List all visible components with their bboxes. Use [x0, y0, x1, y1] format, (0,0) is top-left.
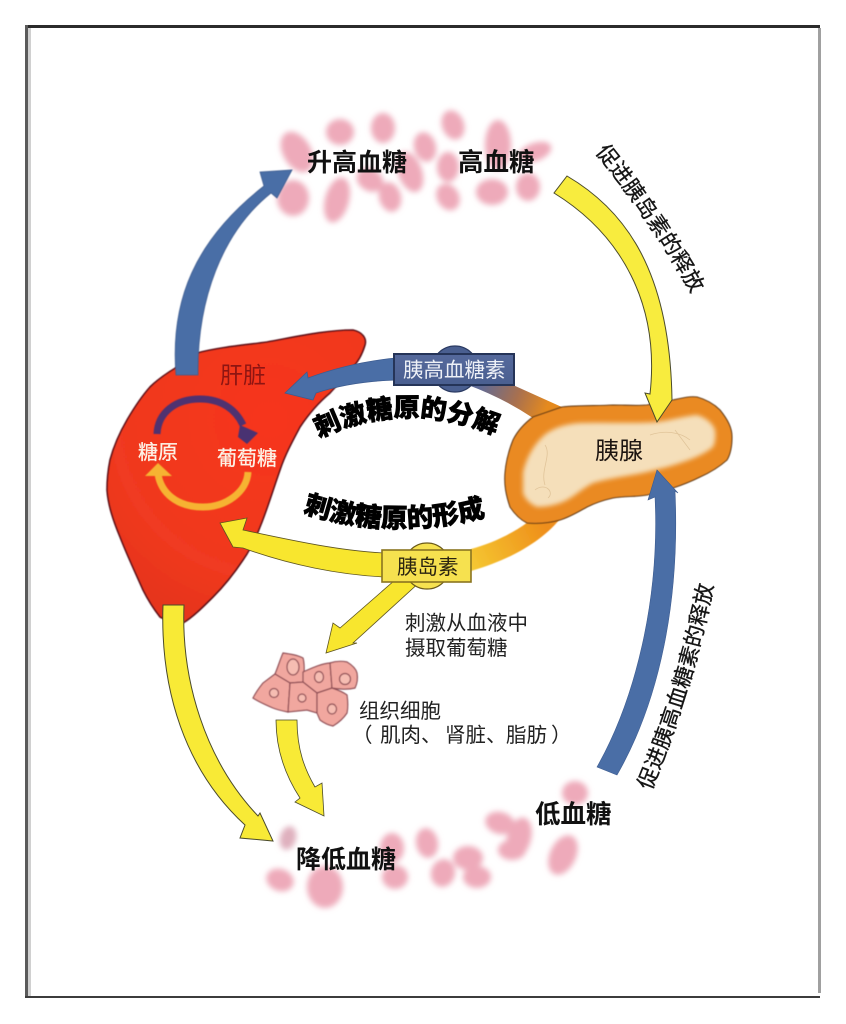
pancreas label: 胰腺	[595, 438, 643, 465]
label: glycogen: 糖原	[138, 441, 178, 464]
label: tissue cells: 脂肪	[506, 724, 547, 747]
label: tissue cells: 肾脏、	[445, 724, 506, 747]
label: low blood glucose: 低血糖	[535, 801, 612, 829]
arrow: cells lower blood glucose	[276, 720, 324, 816]
tissue cells	[253, 653, 357, 726]
insulin box: 胰岛素	[397, 556, 458, 579]
arrow: liver lowers blood glucose	[163, 605, 273, 841]
arrow: liver raises blood glucose	[175, 170, 292, 375]
glucagon box	[394, 346, 514, 392]
label: promotes insulin release: 促进胰岛素的释放	[596, 144, 704, 294]
label: stimulates glycogen formation: 刺激糖原的形成	[303, 492, 485, 530]
label: promotes glucagon release: 促进胰高血糖素的释放	[636, 583, 715, 789]
glucagon box: 胰高血糖素	[403, 359, 506, 382]
blood cells: low glucose	[263, 781, 588, 908]
liver	[107, 330, 365, 623]
label: lowers blood glucose: 降低血糖	[296, 846, 396, 874]
arrow: high glucose to pancreas	[554, 176, 672, 422]
label: stimulates glucose uptake: 摄取葡萄糖	[405, 637, 508, 660]
label: stimulates glucose uptake	[405, 612, 528, 660]
label: tissue cells	[352, 700, 572, 747]
label: raises blood glucose: 升高血糖	[307, 149, 407, 177]
insulin box	[382, 543, 471, 589]
arrow: glucagon to liver	[285, 358, 396, 400]
label: high blood glucose: 高血糖	[458, 149, 535, 177]
label: stimulates glucose uptake: 刺激从血液中	[405, 612, 528, 635]
label: glucose: 葡萄糖	[217, 447, 277, 470]
arrow: low glucose to pancreas	[597, 470, 678, 775]
label: tissue cells: 肌肉、	[380, 724, 442, 747]
pancreas	[468, 385, 732, 571]
label: tissue cells: 组织细胞	[359, 700, 441, 723]
arrow: glucose to glycogen	[145, 463, 248, 507]
blood cells: high glucose	[274, 107, 554, 225]
arrow: insulin to tissue cells	[326, 580, 422, 653]
label: tissue cells: （	[352, 724, 372, 747]
label: tissue cells: ）	[551, 724, 572, 747]
arrow: insulin to liver	[220, 518, 385, 577]
label: stimulates glycogen breakdown: 刺激糖原的分解	[312, 394, 502, 439]
liver label: 肝脏	[220, 362, 266, 388]
arrow: glycogen to glucose	[157, 399, 258, 444]
duct to glucagon	[468, 385, 564, 418]
